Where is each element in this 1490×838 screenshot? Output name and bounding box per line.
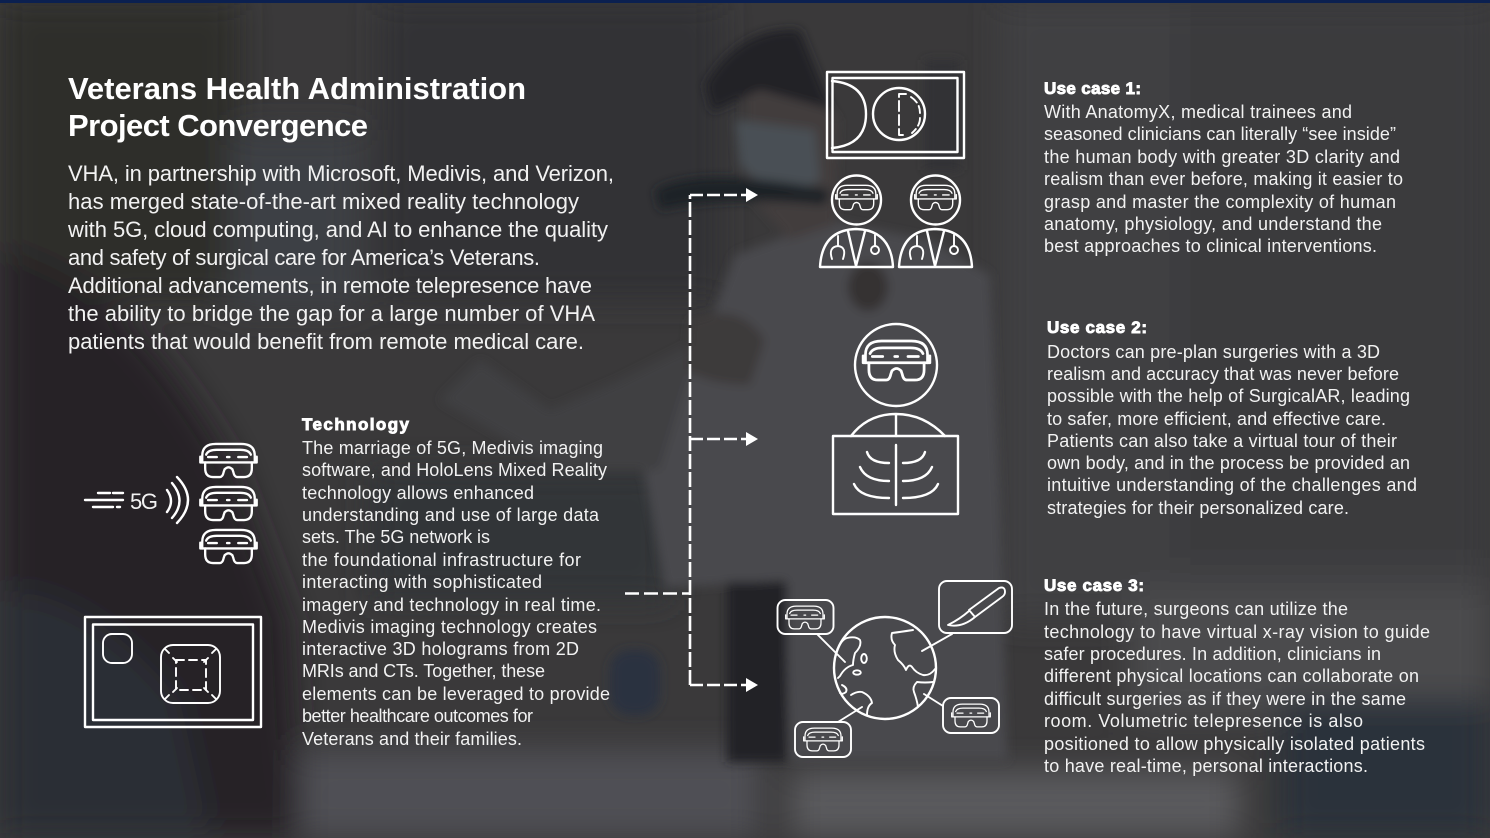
use case 2 text: intuitive understanding of the challenges and (1047, 475, 1417, 495)
intro text block: Additional advancements, in remote telepresence have (68, 273, 592, 298)
use case 3 text: positioned to allow physically isolated patients (1044, 734, 1425, 754)
use case 2 text: Use case 2: (1047, 318, 1147, 337)
title: Veterans Health Administration (68, 71, 526, 106)
technology text block: Technology (302, 415, 410, 434)
use case 3 text: to have real-time, personal interactions. (1044, 756, 1368, 776)
technology text block: understanding and use of large data (302, 505, 600, 525)
use case 2 text: own body, and in the process be provided an (1047, 453, 1410, 473)
technology text block: interacting with sophisticated (302, 572, 542, 592)
intro text block: the ability to bridge the gap for a large number of VHA (68, 301, 595, 326)
use case 1 text: With AnatomyX, medical trainees and (1044, 102, 1352, 122)
title (68, 71, 526, 143)
icon: globe with connected headsets and scalpel (778, 581, 1012, 757)
use case 3 text (1044, 576, 1430, 776)
use case 1 text (1044, 79, 1403, 256)
technology text block: Medivis imaging technology creates (302, 617, 597, 637)
use case 1 text: the human body with greater 3D clarity and (1044, 147, 1400, 167)
use case 1 text: anatomy, physiology, and understand the (1044, 214, 1382, 234)
icon: tablet with hologram (85, 617, 261, 727)
intro text block: and safety of surgical care for America’s Veterans. (68, 245, 540, 270)
use case 2 text: possible with the help of SurgicalAR, leading (1047, 386, 1410, 406)
technology text block: better healthcare outcomes for (302, 706, 533, 726)
use case 3 text: difficult surgeries as if they were in the same (1044, 689, 1406, 709)
use case 1 text: best approaches to clinical interventions. (1044, 236, 1377, 256)
use case 2 text: to safer, more efficient, and effective care. (1047, 409, 1386, 429)
top navy strip (0, 0, 1490, 3)
title: Project Convergence (68, 108, 368, 143)
use case 3 text: In the future, surgeons can utilize the (1044, 599, 1348, 619)
use case 2 text: Patients can also take a virtual tour of their (1047, 431, 1397, 451)
technology text block: sets. The 5G network is (302, 527, 490, 547)
use case 3 text: Use case 3: (1044, 576, 1144, 595)
icon: 5G signal to three headsets (85, 444, 257, 563)
dashed connector arrows (625, 188, 758, 692)
use case 2 text: Doctors can pre-plan surgeries with a 3D (1047, 342, 1380, 362)
use case 1 text: realism than ever before, making it easier to (1044, 169, 1403, 189)
icon: 5G signal to three headsets: 5G (130, 489, 158, 514)
use case 1 text: seasoned clinicians can literally “see inside” (1044, 124, 1396, 144)
technology text block: imagery and technology in real time. (302, 595, 601, 615)
technology text block: software, and HoloLens Mixed Reality (302, 460, 607, 480)
technology text block: the foundational infrastructure for (302, 550, 581, 570)
use case 2 text: strategies for their personalized care. (1047, 498, 1349, 518)
clinician 1 (820, 176, 893, 267)
technology text block: technology allows enhanced (302, 483, 534, 503)
technology text block: MRIs and CTs. Together, these (302, 661, 545, 681)
use case 2 text: realism and accuracy that was never before (1047, 364, 1399, 384)
use case 3 text: different physical locations can collaborate on (1044, 666, 1419, 686)
intro text block: VHA, in partnership with Microsoft, Medivis, and Verizon, (68, 161, 614, 186)
intro text block: has merged state-of-the-art mixed reality technology (68, 189, 579, 214)
technology text block (302, 415, 610, 749)
icon: anatomy display with two clinicians (820, 72, 972, 267)
technology text block: elements can be leveraged to provide (302, 684, 610, 704)
icon: clinician with x-ray (833, 324, 958, 514)
technology text block: Veterans and their families. (302, 729, 522, 749)
use case 2 text (1047, 318, 1417, 518)
use case 1 text: grasp and master the complexity of human (1044, 192, 1396, 212)
intro text block: patients that would benefit from remote medical care. (68, 329, 584, 354)
clinician 2 (899, 176, 972, 267)
use case 3 text: technology to have virtual x-ray vision to guide (1044, 622, 1430, 642)
technology text block: The marriage of 5G, Medivis imaging (302, 438, 603, 458)
technology text block: interactive 3D holograms from 2D (302, 639, 579, 659)
use case 3 text: safer procedures. In addition, clinicians in (1044, 644, 1381, 664)
intro text block: with 5G, cloud computing, and AI to enhance the quality (67, 217, 608, 242)
use case 3 text: room. Volumetric telepresence is also (1044, 711, 1363, 731)
use case 1 text: Use case 1: (1044, 79, 1141, 98)
intro text block (67, 161, 614, 354)
